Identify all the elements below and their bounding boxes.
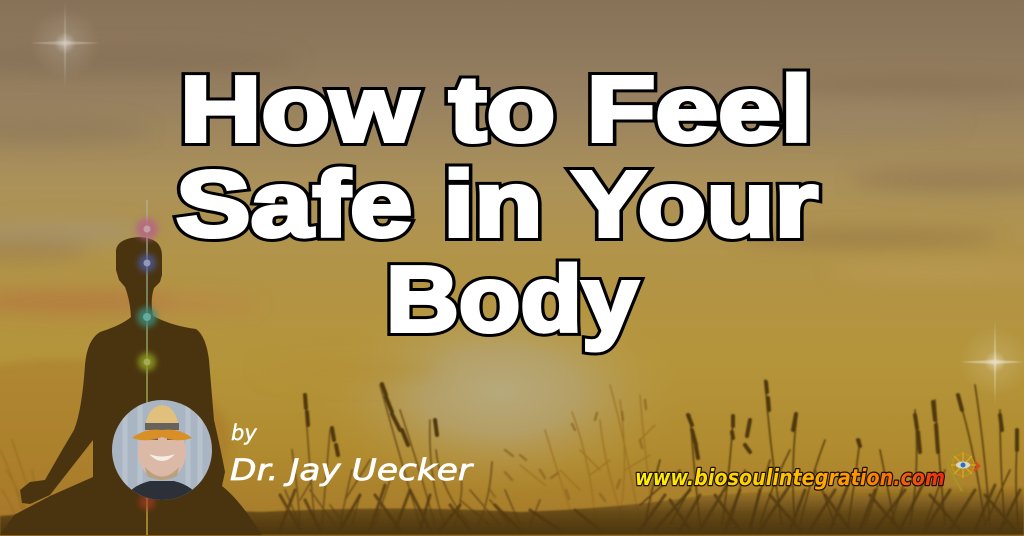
- icon: eye emblem: [948, 438, 979, 491]
- grass silhouette: [0, 380, 1024, 535]
- star flare: right: [959, 318, 1024, 405]
- chakra light column: [136, 200, 158, 535]
- feathery leaves: [490, 400, 646, 501]
- star flare: top left: [29, 0, 101, 90]
- title line: How to Feel: How to Feel: [180, 57, 812, 161]
- mid-tone grass mass: [285, 385, 540, 525]
- title: [176, 57, 818, 351]
- title line: Body: Body: [386, 247, 638, 351]
- silhouette of meditating figure: [0, 237, 262, 535]
- byline: [230, 421, 474, 487]
- author portrait: [110, 398, 214, 502]
- dark right stems: [640, 380, 1018, 525]
- title line: Safe in Your: Safe in Your: [176, 152, 818, 256]
- dense bottom band: [280, 480, 1020, 530]
- author name: Dr. Jay Uecker: [230, 453, 474, 487]
- by label: by: [231, 421, 257, 445]
- title line: How to Feel: How to Feel: [180, 57, 812, 161]
- website url: www.biosoulintegration.com: [635, 466, 945, 491]
- website url: www.biosoulintegration.com: [635, 466, 945, 491]
- title line: Body: Body: [386, 247, 638, 351]
- seed heads: [305, 382, 1017, 458]
- title line: Safe in Your: Safe in Your: [176, 152, 818, 256]
- light distant stems: [0, 385, 655, 530]
